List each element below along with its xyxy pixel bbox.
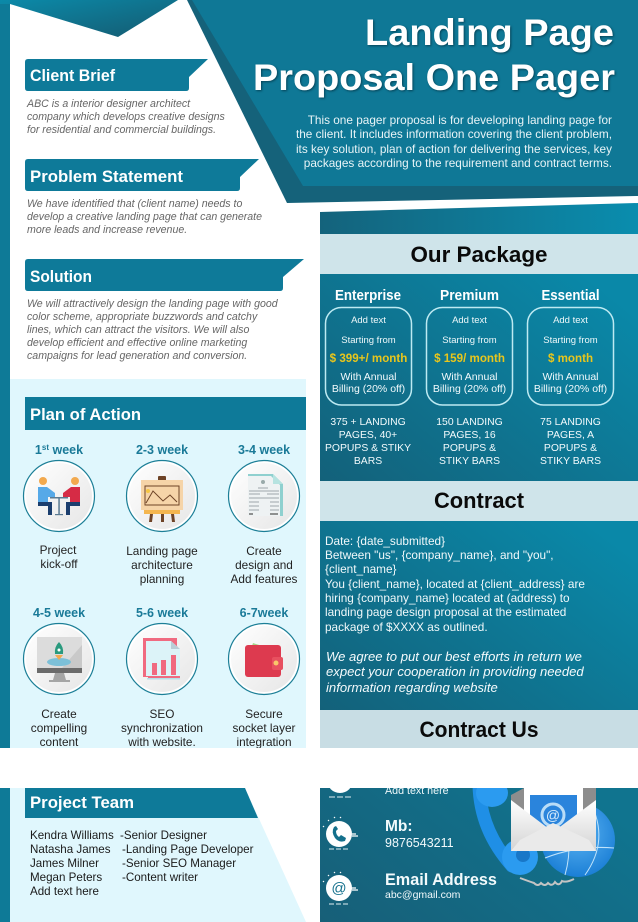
package: enterprise: 375 + LANDING bbox=[330, 417, 406, 428]
step: 6-7 week: Secure bbox=[245, 707, 283, 721]
solution text: lines, which can attract the visitors. We will also bbox=[27, 324, 249, 336]
icon: easel bbox=[141, 476, 183, 522]
contract agreement note: We agree to put our best efforts in return we bbox=[326, 649, 582, 664]
step: 3-4 week: Create bbox=[246, 544, 282, 558]
package: premium: POPUPS & bbox=[443, 443, 496, 454]
step: 1st week: st bbox=[42, 443, 49, 452]
icon: bar chart report bbox=[143, 638, 180, 680]
step: 5-6 week: SEO bbox=[150, 707, 174, 721]
step: 4-5 week: content bbox=[40, 735, 79, 749]
package: essential bbox=[528, 288, 614, 467]
step: 1st week: Project bbox=[40, 543, 77, 557]
icon: wallet bbox=[245, 643, 283, 677]
email value: abc@gmail.com bbox=[385, 889, 461, 901]
package: enterprise: Starting from bbox=[341, 335, 396, 346]
panel: solution: Solution bbox=[30, 268, 92, 286]
icon: monitor with rocket bbox=[37, 637, 82, 682]
icon: address pin bbox=[327, 767, 353, 797]
icon: document bbox=[248, 474, 283, 516]
package: essential: Essential bbox=[542, 288, 600, 304]
panel: project team: Project Team bbox=[30, 794, 134, 812]
step: 1st week: kick-off bbox=[40, 557, 78, 571]
team list: Natasha James bbox=[30, 843, 111, 856]
problem statement text: develop a creative landing page that can generate bbox=[27, 211, 262, 223]
package: enterprise: $ 399+/ month bbox=[330, 352, 407, 365]
contract terms: landing page design proposal at the estimated bbox=[325, 605, 566, 619]
step: 5-6 week: synchronization bbox=[121, 721, 203, 735]
panel: contract bbox=[320, 481, 638, 710]
solution text: color scheme, appropriate buzzwords and catchy bbox=[27, 311, 258, 323]
package: premium: With Annual bbox=[441, 371, 498, 383]
step: 1st week bbox=[24, 443, 94, 571]
client brief text: ABC is a interior designer architect bbox=[26, 98, 191, 110]
team list: -Content writer bbox=[122, 871, 198, 884]
package: enterprise: PAGES, 40+ bbox=[339, 430, 397, 441]
package: premium: Premium bbox=[440, 288, 499, 304]
team list: -Landing Page Developer bbox=[122, 843, 254, 856]
mobile label: Mb: bbox=[385, 818, 413, 835]
step: 3-4 week: Add features bbox=[231, 572, 298, 586]
step: 3-4 week bbox=[228, 443, 300, 586]
step: 2-3 week: Landing page bbox=[126, 544, 198, 558]
contract terms: hiring {company_name} located at (address) to bbox=[325, 591, 570, 605]
icon: phone, globe and envelope bbox=[476, 779, 615, 885]
step: 2-3 week: architecture bbox=[131, 558, 193, 572]
contract terms: {client_name} bbox=[325, 562, 397, 576]
contract terms bbox=[325, 534, 585, 634]
solution text: campaigns for lead generation and conversion. bbox=[27, 350, 247, 362]
problem statement text: We have identified that (client name) needs to bbox=[27, 198, 242, 210]
panel: plan of action: Plan of Action bbox=[30, 406, 141, 424]
panel: our package bbox=[320, 234, 638, 481]
team list: Megan Peters bbox=[30, 871, 102, 884]
package: essential: STIKY BARS bbox=[540, 456, 601, 467]
panel: problem statement bbox=[25, 159, 262, 236]
package: essential: With Annual bbox=[542, 371, 599, 383]
header panel bbox=[187, 0, 638, 203]
step: 2-3 week: planning bbox=[140, 572, 184, 586]
email label: Email Address bbox=[385, 871, 497, 889]
solution text bbox=[27, 298, 279, 362]
icon: email badge bbox=[323, 872, 358, 904]
package: essential: Add text bbox=[553, 315, 588, 326]
panel: solution bbox=[25, 259, 304, 362]
panel: our package: Our Package bbox=[410, 242, 548, 267]
step: 3-4 week: design and bbox=[235, 558, 293, 572]
team list: James Milner bbox=[30, 857, 99, 870]
package: essential: 75 LANDING bbox=[540, 417, 601, 428]
step: 4-5 week: 4-5 week bbox=[33, 606, 85, 620]
step: 6-7 week: 6-7week bbox=[240, 606, 288, 620]
package: premium: Starting from bbox=[442, 335, 497, 346]
contract terms: Between "us", {company_name}, and "you", bbox=[325, 548, 554, 562]
package: premium: Add text bbox=[452, 315, 487, 326]
contract terms: package of $XXXX as outlined. bbox=[325, 620, 488, 634]
icon: meeting bbox=[38, 477, 80, 515]
panel: project team bbox=[10, 788, 306, 922]
package: essential: Billing (20% off) bbox=[534, 383, 607, 395]
panel: contact details: Add text here bbox=[385, 785, 449, 797]
solution text: develop efficient and effective online marketing bbox=[27, 337, 247, 349]
step: 5-6 week: with website. bbox=[127, 735, 196, 749]
contract terms: Date: {date_submitted} bbox=[325, 534, 445, 548]
contract agreement note bbox=[326, 649, 584, 695]
package: essential: Starting from bbox=[543, 335, 598, 346]
client brief text: company which develops creative designs bbox=[27, 111, 226, 123]
icon: phone badge bbox=[323, 817, 358, 849]
step: 1st week: week bbox=[49, 443, 83, 457]
header description: the client. It includes information covering the client problem, bbox=[296, 127, 612, 141]
panel: plan of action bbox=[10, 379, 306, 749]
problem statement text: more leads and increase revenue. bbox=[27, 224, 187, 236]
solution text: We will attractively design the landing page with good bbox=[27, 298, 279, 310]
package: premium: PAGES, 16 bbox=[443, 430, 496, 441]
step: 3-4 week: 3-4 week bbox=[238, 443, 290, 457]
package: premium bbox=[426, 288, 512, 467]
icon: email badge: @ bbox=[331, 880, 347, 897]
panel: client brief: Client Brief bbox=[30, 67, 115, 85]
title bbox=[253, 11, 615, 98]
contract terms: You {client_name}, located at {client_address} are bbox=[325, 577, 585, 591]
team list: -Senior Designer bbox=[120, 829, 207, 842]
package: premium: 150 LANDING bbox=[436, 417, 503, 428]
blank white separator band bbox=[0, 748, 638, 788]
team list: Kendra Williams bbox=[30, 829, 114, 842]
left edge bar bbox=[0, 0, 10, 922]
step: 6-7 week: socket layer bbox=[233, 721, 296, 735]
title: Proposal One Pager bbox=[253, 56, 615, 98]
team list: Add text here bbox=[30, 885, 99, 898]
step: 5-6 week bbox=[121, 606, 203, 749]
package: enterprise: POPUPS & STIKY bbox=[325, 443, 411, 454]
step: 2-3 week: 2-3 week bbox=[136, 443, 188, 457]
package: premium: STIKY BARS bbox=[439, 456, 500, 467]
panel: contact details: Contract Us bbox=[420, 717, 538, 742]
panel: contact details bbox=[320, 710, 638, 922]
package: enterprise: Billing (20% off) bbox=[332, 383, 405, 395]
package: enterprise: Add text bbox=[351, 315, 386, 326]
title: Landing Page bbox=[365, 11, 614, 53]
icon: phone, globe and envelope: @ bbox=[546, 807, 560, 823]
problem statement text bbox=[27, 198, 262, 236]
contract agreement note: expect your cooperation in providing needed bbox=[326, 664, 584, 679]
mobile number: 9876543211 bbox=[385, 836, 454, 850]
panel: problem statement: Problem Statement bbox=[30, 168, 184, 186]
step: 6-7 week bbox=[228, 606, 300, 749]
client brief text: for residential and commercial buildings. bbox=[27, 124, 216, 136]
step: 6-7 week: integration bbox=[236, 735, 292, 749]
package: premium: Billing (20% off) bbox=[433, 383, 506, 395]
package: enterprise bbox=[325, 288, 412, 467]
step: 4-5 week: compelling bbox=[31, 721, 87, 735]
step: 5-6 week: 5-6 week bbox=[136, 606, 188, 620]
package: premium: $ 159/ month bbox=[434, 352, 505, 365]
package: enterprise: With Annual bbox=[340, 371, 397, 383]
contract agreement note: information regarding website bbox=[326, 680, 498, 695]
team list: -Senior SEO Manager bbox=[122, 857, 236, 870]
top-left chevron bbox=[0, 0, 178, 37]
step: 1st week: 1 bbox=[35, 443, 42, 457]
header description: its key solution, plan of action for delivering the services, key bbox=[296, 142, 612, 156]
header description: This one pager proposal is for developing landing page for bbox=[308, 113, 612, 127]
panel: client brief bbox=[25, 59, 226, 136]
step: 2-3 week bbox=[126, 443, 198, 586]
step: 4-5 week bbox=[24, 606, 94, 749]
package: enterprise: Enterprise bbox=[335, 288, 401, 304]
header description: packages according to the requirement and contract terms. bbox=[304, 156, 612, 170]
header description bbox=[296, 113, 612, 170]
package: essential: PAGES, A bbox=[547, 430, 594, 441]
top right accent band bbox=[320, 203, 638, 234]
package: essential: $ month bbox=[548, 352, 593, 365]
team list bbox=[30, 829, 254, 898]
step: 4-5 week: Create bbox=[41, 707, 77, 721]
package: enterprise: BARS bbox=[354, 456, 382, 467]
client brief text bbox=[26, 98, 226, 136]
panel: contract: Contract bbox=[434, 488, 525, 513]
package: essential: POPUPS & bbox=[544, 443, 597, 454]
